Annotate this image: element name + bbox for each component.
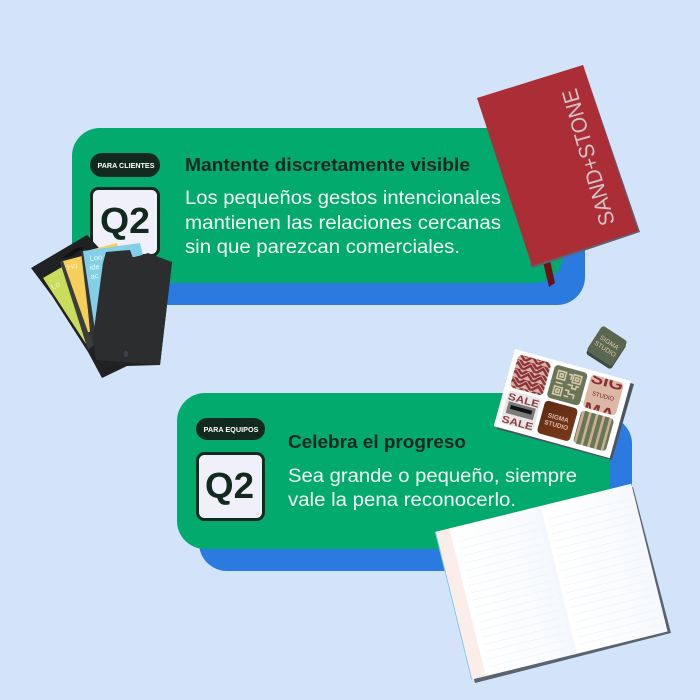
blue card: ide <box>89 262 100 272</box>
quarter box 1: Q2 <box>100 200 150 241</box>
body text 1: Los pequeños gestos intencionales <box>185 188 501 209</box>
sticker: sale <box>499 390 542 434</box>
icon: small square sticker <box>585 325 629 370</box>
panel 1 blue backing <box>94 150 585 305</box>
panel 2 blue backing <box>199 416 632 571</box>
heading 2: Celebra el progreso <box>288 432 466 452</box>
body text 2 <box>288 466 577 511</box>
icon: red notebook SAND+STONE <box>477 65 640 287</box>
sticker: wood <box>537 400 578 442</box>
body text 1 <box>185 188 501 258</box>
panel: para equipos <box>177 393 632 571</box>
sticker: sale: SALE <box>500 414 534 433</box>
blue card <box>83 243 143 330</box>
sticker: sale: SALE <box>507 392 541 411</box>
quarter box 2 <box>198 454 264 520</box>
panel 2 green card <box>177 393 610 549</box>
lime card <box>43 267 88 347</box>
blue card: Loo <box>89 252 103 263</box>
badge: para equipos <box>196 418 265 440</box>
body text 1: mantienen las relaciones cercanas <box>185 213 501 234</box>
sticker: sigma studio type: STUDIO <box>591 391 615 403</box>
body text 2: vale la pena reconocerlo. <box>288 490 516 511</box>
sticker: sigma studio type: SIG <box>589 370 625 395</box>
quarter box 2: Q2 <box>205 465 254 506</box>
body text 1: sin que parezcan comerciales. <box>185 237 460 258</box>
body text 2: Sea grande o pequeño, siempre <box>288 466 577 487</box>
blue card: ac <box>90 271 99 281</box>
icon: card fan in black holder <box>31 235 172 378</box>
sticker: wood: STUDIO <box>543 419 569 432</box>
sticker: qr code <box>546 364 588 406</box>
notebook title: SAND+STONE <box>557 86 620 229</box>
pink endpaper strip <box>436 528 486 679</box>
badge: para clientes: PARA CLIENTES <box>98 161 154 170</box>
icon: small square sticker: STUDIO <box>593 340 617 359</box>
yellow card <box>63 243 118 332</box>
front holder sleeve <box>93 250 172 365</box>
panel 1 green card <box>72 128 563 283</box>
lime card: Lo <box>50 279 62 292</box>
badge: para equipos: PARA EQUIPOS <box>204 425 258 434</box>
icon: open lined notebook <box>435 484 671 683</box>
yellow card: Ho <box>66 261 79 272</box>
badge: para clientes <box>90 153 160 177</box>
heading 1: Mantente discretamente visible <box>185 155 470 175</box>
sticker: stripes <box>573 410 615 452</box>
sticker: chevron <box>510 354 552 396</box>
ribbon bookmark <box>543 260 555 287</box>
panel: para clientes <box>72 128 585 305</box>
sticker: sigma studio type: MA <box>582 400 617 424</box>
quarter box 1 <box>92 188 158 256</box>
icon: sticker sheet <box>494 348 634 460</box>
icon: small square sticker: SIGMA <box>598 334 620 352</box>
sticker: sigma studio type <box>583 375 624 416</box>
sticker: wood: SIGMA <box>547 412 570 425</box>
